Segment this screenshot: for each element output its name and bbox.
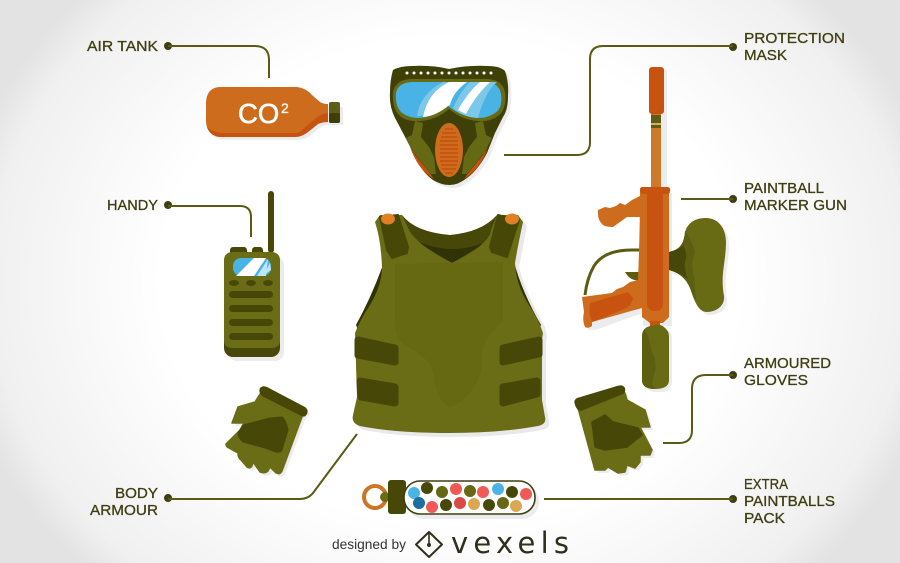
text: CO2: CO [238, 98, 279, 129]
brand: designed by vexels [332, 526, 569, 560]
label: protection mask: PROTECTION [744, 30, 845, 47]
icon: left glove [226, 386, 310, 477]
label: armoured gloves: GLOVES [744, 372, 808, 389]
label: extra paintballs pack: EXTRA [744, 476, 788, 493]
icon: handy radio [224, 191, 284, 361]
label: extra paintballs pack: PACK [744, 510, 785, 527]
mask side panels [406, 121, 492, 179]
icon: paintball marker gun [582, 67, 729, 392]
label: body armour: ARMOUR [90, 502, 158, 519]
foregrip [598, 195, 642, 227]
label: extra paintballs pack [544, 476, 835, 527]
label: air tank: AIR TANK [87, 38, 158, 55]
icon: right glove [574, 385, 655, 476]
label: body armour: BODY [115, 485, 158, 502]
marker body and rear grip [582, 190, 669, 328]
icon: CO2 air tank [206, 87, 343, 140]
barrel [651, 110, 661, 188]
label: extra paintballs pack: PAINTBALLS [744, 493, 835, 510]
icon: protection mask [390, 66, 511, 188]
label: protection mask: MASK [744, 47, 787, 64]
label: paintball marker gun: MARKER GUN [744, 197, 847, 214]
label: air tank [87, 38, 269, 78]
text: CO2: 2 [281, 100, 289, 116]
air bottle [642, 325, 669, 389]
label: handy: HANDY [107, 197, 158, 214]
icon: body armour vest [353, 214, 549, 437]
side arm openings [356, 262, 386, 335]
label: armoured gloves [663, 355, 831, 443]
brand: designed by vexels: designed by [332, 537, 406, 552]
trigger [625, 272, 640, 280]
label: handy [107, 197, 251, 237]
brand: designed by vexels: vexels [451, 526, 569, 560]
label: paintball marker gun: PAINTBALL [744, 180, 824, 197]
feed hose [585, 250, 641, 295]
label: body armour [90, 434, 357, 519]
neck opening [402, 215, 497, 263]
hopper [669, 218, 726, 312]
icon: paintballs pack [364, 480, 539, 519]
label: armoured gloves: ARMOURED [744, 355, 831, 372]
label: protection mask [504, 30, 845, 155]
label: paintball marker gun [681, 180, 847, 214]
